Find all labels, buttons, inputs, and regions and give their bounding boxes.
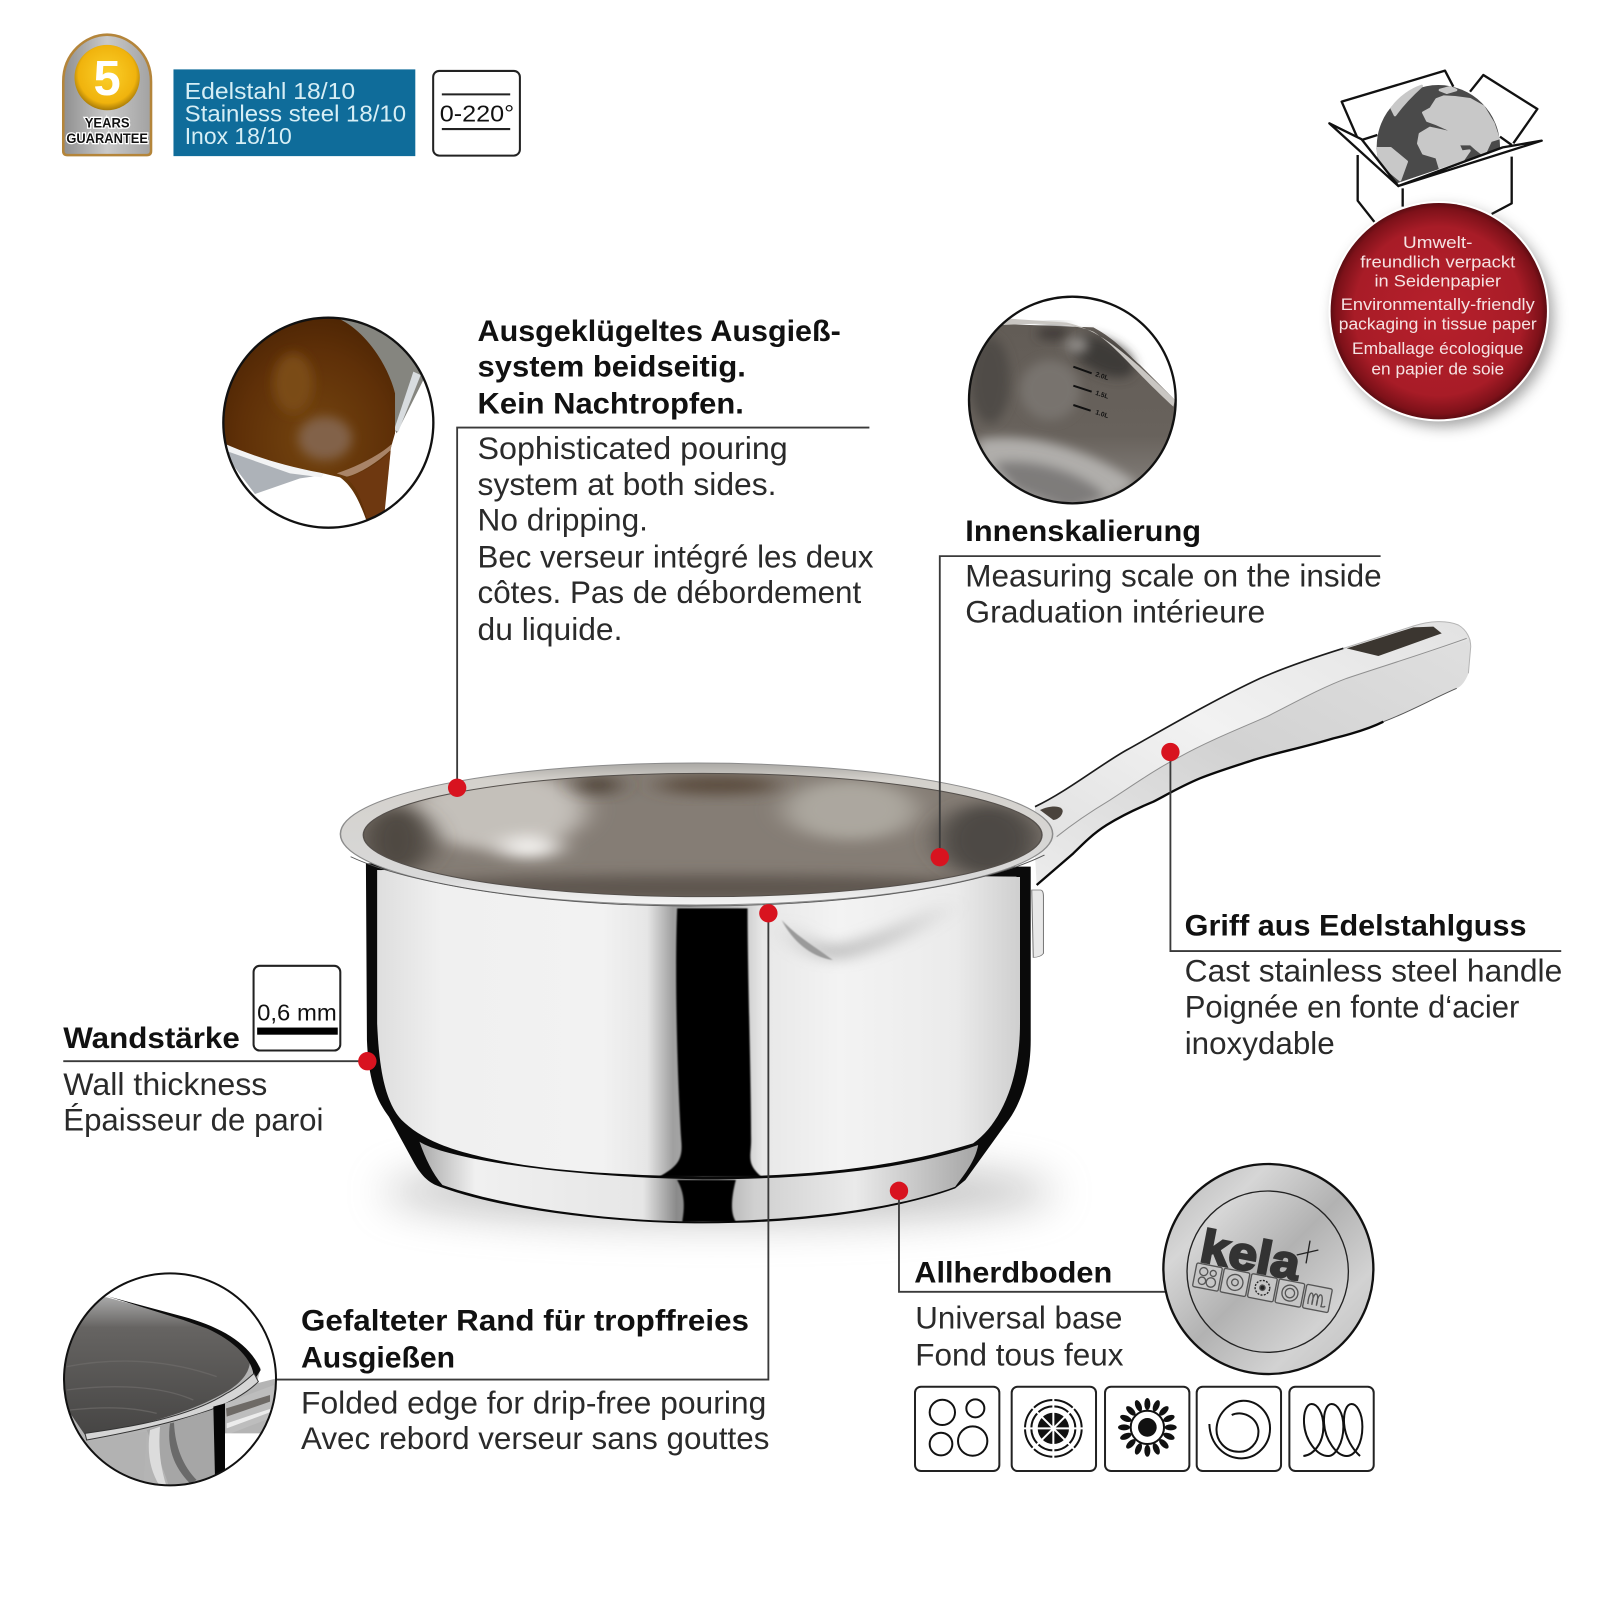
badge: 5 years guarantee: 5 bbox=[94, 52, 121, 106]
icon: wall thickness 0,6 mm: 0,6 mm bbox=[257, 999, 337, 1025]
callout heading and text: pouring system: No dripping. bbox=[478, 502, 648, 538]
badge: eco-friendly packaging: Umwelt- bbox=[1403, 233, 1472, 252]
callout heading and text: pouring system: system at both sides. bbox=[478, 466, 777, 502]
callout heading and text: folded edge: Avec rebord verseur sans gouttes bbox=[301, 1420, 769, 1456]
callout heading and text: pouring system: Ausgeklügeltes Ausgieß- bbox=[478, 315, 841, 348]
badge: eco-friendly packaging: freundlich verpackt bbox=[1360, 252, 1516, 271]
icon: oven temperature 0-220: 0-220° bbox=[440, 100, 514, 126]
callout heading and text: pouring system: Kein Nachtropfen. bbox=[478, 387, 744, 420]
callout heading and text: cast steel handle: Cast stainless steel handle bbox=[1185, 953, 1562, 989]
icon: ceramic hob bbox=[915, 1387, 999, 1471]
callout heading and text: measuring scale: Innenskalierung bbox=[965, 515, 1201, 548]
callout heading and text: pouring system: côtes. Pas de débordement bbox=[478, 574, 861, 610]
callout heading and text: wall thickness: Épaisseur de paroi bbox=[63, 1102, 323, 1138]
callout heading and text: folded edge bbox=[301, 1305, 769, 1456]
photo circle: measuring scale inside the pan: 1.0L bbox=[1094, 409, 1109, 420]
badge: eco-friendly packaging: Environmentally-friendly bbox=[1341, 295, 1535, 314]
pan black reflection bbox=[659, 908, 761, 1222]
photo circle: measuring scale inside the pan: 2.0L bbox=[1094, 371, 1109, 382]
badge: eco-friendly packaging: en papier de soie bbox=[1371, 359, 1504, 378]
material label: stainless steel 18/10: Inox 18/10 bbox=[185, 123, 292, 149]
callout heading and text: universal base bbox=[914, 1257, 1124, 1372]
callout heading and text: pouring system: du liquide. bbox=[478, 611, 622, 647]
badge: eco-friendly packaging: Emballage écologique bbox=[1352, 339, 1523, 358]
pan rivet bbox=[1032, 890, 1043, 957]
callout heading and text: pouring system bbox=[478, 315, 874, 647]
callout heading and text: wall thickness: Wandstärke bbox=[63, 1022, 240, 1055]
callout heading and text: universal base: Universal base bbox=[915, 1300, 1122, 1336]
photo circle: folded edge bbox=[63, 1272, 277, 1486]
icon: globe in open cardboard box bbox=[1329, 71, 1542, 223]
badge: 5 years guarantee: GUARANTEE bbox=[66, 131, 148, 146]
saucepan handle bbox=[1035, 622, 1471, 885]
callout heading and text: wall thickness bbox=[63, 1022, 323, 1138]
photo circle: pan base with kela logo bbox=[1163, 1164, 1373, 1374]
material label: stainless steel 18/10: Stainless steel 18/10 bbox=[185, 100, 406, 126]
hob compatibility icons bbox=[915, 1387, 1374, 1471]
icon: wall thickness 0,6 mm bbox=[254, 966, 340, 1051]
callout heading and text: pouring system: Sophisticated pouring bbox=[478, 430, 788, 466]
callout heading and text: cast steel handle: Griff aus Edelstahlguss bbox=[1185, 910, 1527, 943]
callout heading and text: universal base: Allherdboden bbox=[914, 1257, 1112, 1290]
badge: eco-friendly packaging: packaging in tissue paper bbox=[1339, 315, 1537, 334]
pan spout dent reflection bbox=[782, 900, 953, 961]
icon: oven temperature 0-220 bbox=[433, 71, 520, 156]
icon: radiant hob bbox=[1012, 1387, 1096, 1471]
photo circle: measuring scale inside the pan: 1.5L bbox=[1094, 390, 1109, 401]
floor shadow under pan bbox=[383, 1161, 1056, 1222]
badge: 5 years guarantee bbox=[63, 35, 151, 155]
callout marker dots bbox=[358, 743, 1180, 1200]
pan silver wall bbox=[377, 870, 1020, 1177]
callout heading and text: measuring scale: Measuring scale on the inside bbox=[965, 558, 1382, 594]
badge: 5 years guarantee: YEARS bbox=[85, 116, 130, 131]
icon: gas flame bbox=[1105, 1387, 1189, 1471]
callout heading and text: measuring scale: Graduation intérieure bbox=[965, 593, 1265, 629]
callout heading and text: cast steel handle: inoxydable bbox=[1185, 1025, 1335, 1061]
callout heading and text: universal base: Fond tous feux bbox=[915, 1336, 1124, 1372]
pan outer silhouette bbox=[366, 863, 1031, 1223]
callout heading and text: pouring system: Bec verseur intégré les deux bbox=[478, 538, 874, 574]
logo hob icons bbox=[1192, 1263, 1332, 1313]
callout lines to pan bbox=[63, 428, 1561, 1380]
callout heading and text: wall thickness: Wall thickness bbox=[63, 1066, 267, 1102]
callout heading and text: cast steel handle bbox=[1185, 910, 1562, 1061]
badge: eco-friendly packaging: in Seidenpapier bbox=[1374, 272, 1501, 291]
callout heading and text: pouring system: system beidseitig. bbox=[478, 351, 746, 384]
photo circle: measuring scale inside the pan bbox=[960, 297, 1180, 510]
saucepan bbox=[340, 763, 1065, 1223]
callout heading and text: cast steel handle: Poignée en fonte d‘acier bbox=[1185, 988, 1519, 1024]
material label: stainless steel 18/10 bbox=[173, 69, 415, 156]
material label: stainless steel 18/10: Edelstahl 18/10 bbox=[185, 78, 355, 104]
kela logo: kela bbox=[1196, 1220, 1306, 1290]
pan rim bbox=[340, 763, 1053, 905]
icon: electric spiral hob bbox=[1197, 1387, 1281, 1471]
pan interior bbox=[364, 774, 1042, 896]
photo circle: sauce pouring from spout bbox=[217, 317, 433, 528]
callout heading and text: folded edge: Folded edge for drip-free pouring bbox=[301, 1384, 766, 1420]
callout heading and text: measuring scale bbox=[965, 515, 1382, 629]
pan induction base band bbox=[419, 1142, 978, 1222]
icon: induction coil bbox=[1289, 1387, 1374, 1471]
callout heading and text: folded edge: Gefalteter Rand für tropffreies bbox=[301, 1305, 749, 1338]
callout heading and text: folded edge: Ausgießen bbox=[301, 1341, 455, 1374]
badge: eco-friendly packaging bbox=[1329, 201, 1553, 427]
